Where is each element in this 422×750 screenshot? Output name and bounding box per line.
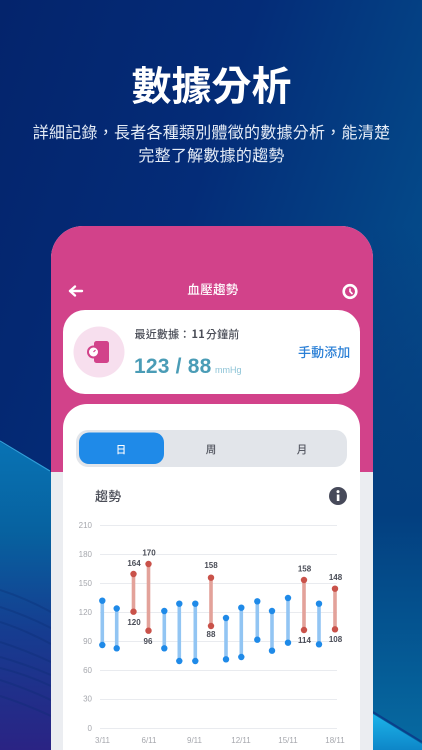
high reading value labels: 120 xyxy=(127,618,141,627)
latest reading label: 最近數據：11分鐘前 xyxy=(134,326,240,342)
subtitle: 完整了解數據的趨勢 xyxy=(138,142,285,166)
phone body xyxy=(51,226,373,750)
panel: latest reading card xyxy=(63,310,360,394)
subtitle: 詳細記錄，長者各種類別體徵的數據分析，能清楚 xyxy=(33,119,390,143)
high readings xyxy=(134,564,335,631)
high reading value labels: 96 xyxy=(144,637,153,646)
x axis labels xyxy=(95,736,345,745)
icon: info xyxy=(329,487,347,505)
screen title: 血壓趨勢 xyxy=(187,279,239,298)
period tabs xyxy=(76,430,347,467)
icon: back arrow xyxy=(70,286,82,296)
reading value: 123 / 88 xyxy=(134,355,212,378)
manual add action: 手動添加 xyxy=(298,342,350,361)
y axis labels: 180 xyxy=(79,550,93,559)
x axis labels: 12/11 xyxy=(231,736,251,745)
x axis labels: 9/11 xyxy=(187,736,203,745)
x axis labels: 3/11 xyxy=(95,736,111,745)
icon: blood pressure cuff xyxy=(74,326,124,378)
blood pressure range chart xyxy=(79,521,345,745)
high reading value labels: 148 xyxy=(329,573,343,582)
y axis labels: 120 xyxy=(79,608,93,617)
period tabs: 周 xyxy=(206,442,216,457)
period tabs: 日 xyxy=(116,442,126,457)
unit: mmHg xyxy=(215,365,242,375)
y axis labels: 90 xyxy=(83,637,93,646)
y axis labels: 60 xyxy=(83,666,93,675)
high reading value labels: 164 xyxy=(127,559,141,568)
y axis labels: 150 xyxy=(79,579,93,588)
normal readings xyxy=(102,598,319,661)
decorative wave bottom left xyxy=(0,441,51,750)
y axis labels: 210 xyxy=(79,521,93,530)
high reading value labels: 170 xyxy=(142,548,156,558)
title: 數據分析 xyxy=(132,54,292,112)
phone pink header xyxy=(51,226,373,472)
high reading value labels: 88 xyxy=(207,630,216,639)
y axis labels: 30 xyxy=(83,694,93,704)
y axis grid and labels xyxy=(100,526,337,728)
decorative wave bottom right xyxy=(373,712,422,750)
high reading value labels xyxy=(127,548,343,646)
x axis labels: 15/11 xyxy=(278,736,298,745)
high reading value labels: 114 xyxy=(298,636,312,645)
panel: trend card xyxy=(63,404,360,750)
subtitle xyxy=(33,119,390,166)
y axis labels: 0 xyxy=(88,724,93,733)
phone mockup xyxy=(51,226,373,750)
high reading value labels: 158 xyxy=(204,561,218,570)
chart heading: 趨勢 xyxy=(95,486,121,505)
high reading value labels: 158 xyxy=(298,564,312,574)
x axis labels: 6/11 xyxy=(142,736,157,745)
icon: clock xyxy=(344,285,356,298)
x axis labels: 18/11 xyxy=(325,736,345,745)
y axis labels xyxy=(79,521,93,733)
period tabs: 月 xyxy=(297,442,307,457)
high reading value labels: 108 xyxy=(329,635,343,644)
